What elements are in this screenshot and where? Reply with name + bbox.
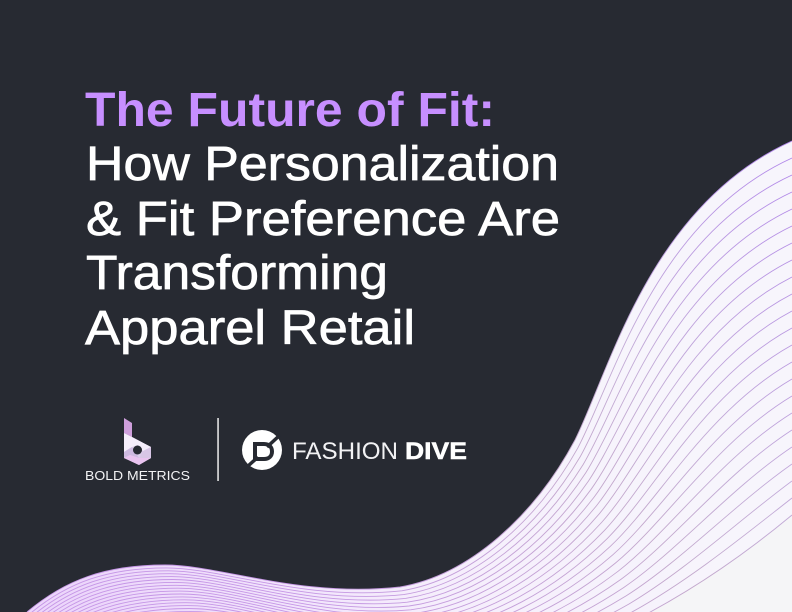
wordmark: DIVE: DIVE (405, 438, 467, 465)
wordmark: Bold Metrics: BOLD METRICS (85, 468, 190, 483)
logo: Fashion Dive (242, 430, 467, 470)
title line 4: Transforming (86, 247, 388, 300)
lower right pale area (652, 515, 792, 612)
wave fill (27, 141, 792, 612)
icon: Bold Metrics b mark (124, 418, 151, 465)
title (85, 84, 560, 355)
divider (217, 418, 219, 481)
icon: Fashion Dive circle mark (242, 430, 282, 470)
logo: Bold Metrics (85, 418, 190, 483)
title line 3: & Fit Preference Are (86, 193, 560, 246)
title line 5: Apparel Retail (85, 302, 415, 355)
title line 2: How Personalization (86, 138, 559, 191)
wordmark: FASHION: FASHION (292, 438, 398, 465)
title line 1: The Future of Fit: (85, 84, 495, 137)
